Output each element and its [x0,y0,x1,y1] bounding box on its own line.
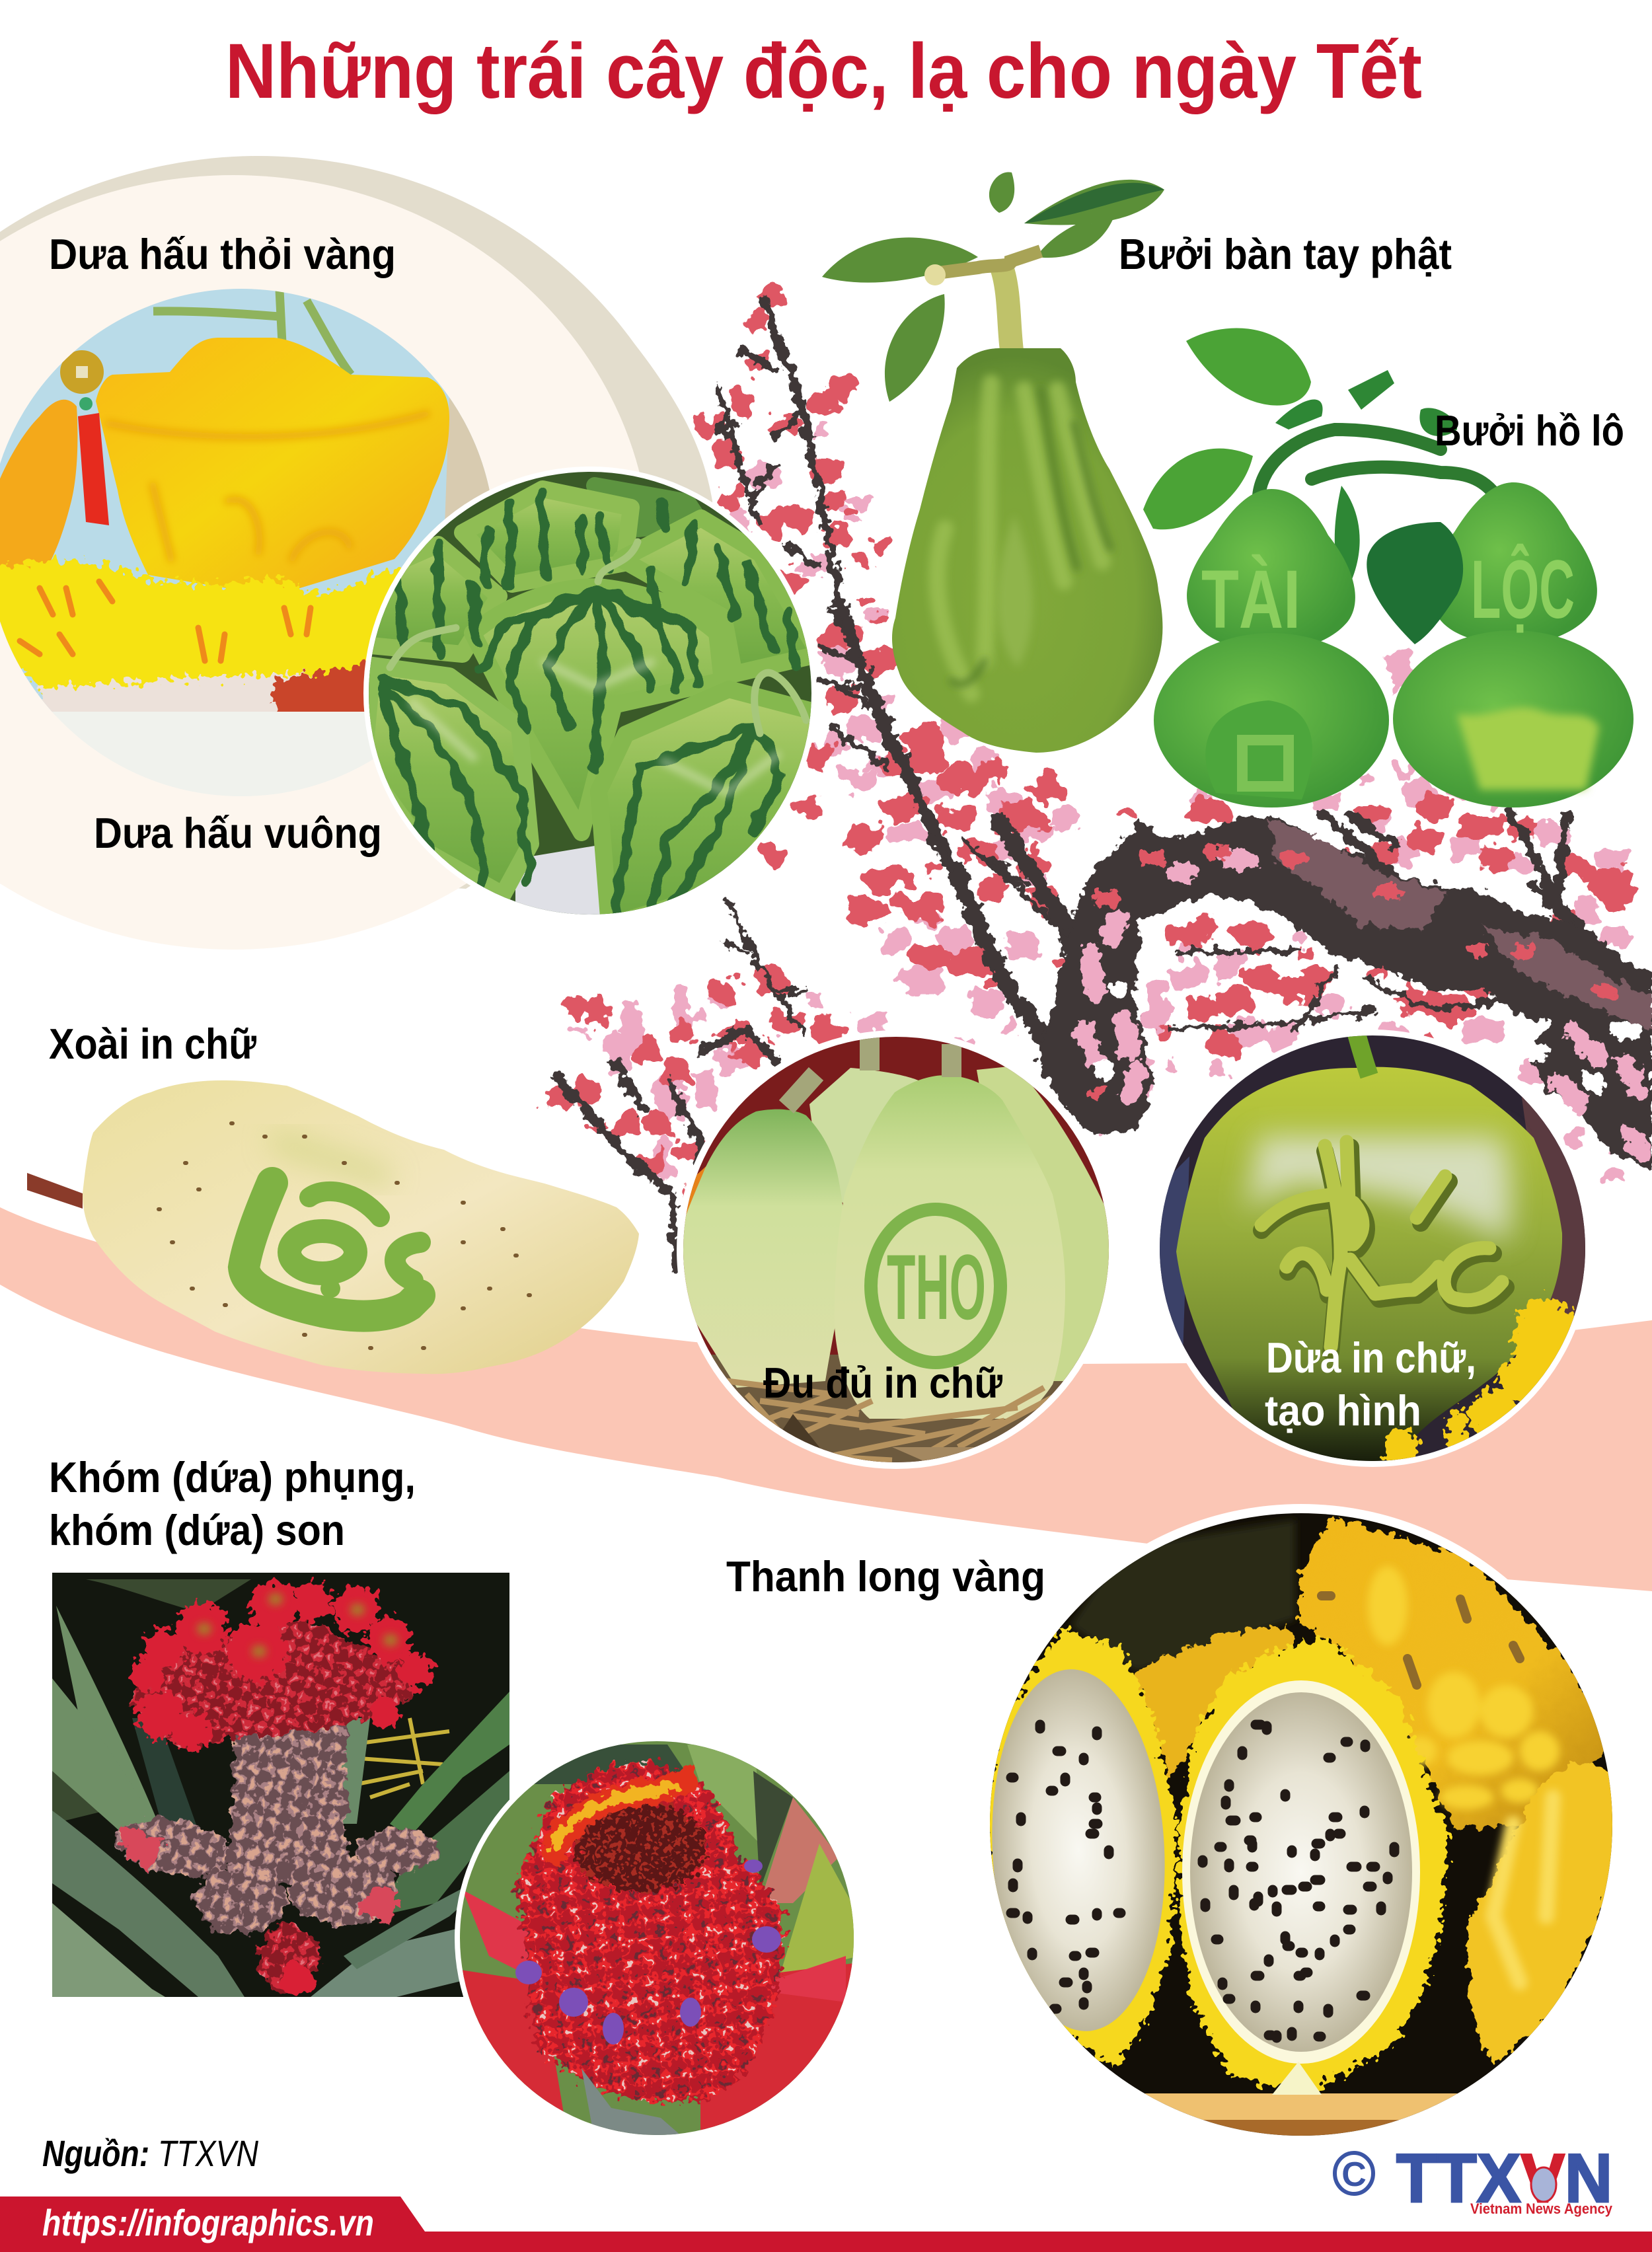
right lower fruit [1467,1761,1619,2064]
coconut body [1176,1067,1562,1470]
melon highlights [410,661,780,793]
bough mauve highlight [1269,819,1652,1031]
title: Những trái cây độc, lạ cho ngày Tết [225,28,1422,115]
lower red bracts [456,1963,859,2141]
vine [153,290,351,375]
green background [456,1738,859,2141]
coconut stem [1357,1034,1369,1076]
photo: red pineapple [455,1736,859,2141]
crown tufts [131,1582,435,1751]
dark crown centre [575,1802,707,1892]
label: coconut: Dừa in chữ, [1266,1333,1476,1382]
melon: top back [463,489,631,584]
pink lobe tips [119,1825,396,1923]
back centre papaya [809,1068,920,1209]
label: square watermelon: Dưa hấu vuông [94,809,382,857]
agency name: Vietnam News Agency [1470,2200,1613,2217]
pink on bough [1084,852,1641,1150]
red pineapple ring [455,1736,859,2140]
crest arc [554,1781,684,1850]
dark background [985,1507,1619,2141]
leaf dark heart [1367,522,1463,644]
stems [786,1037,952,1107]
mango stem [27,1173,83,1209]
melon: left [357,544,499,654]
back right papaya [977,1066,1117,1381]
centre back fruit [1135,1626,1295,1782]
logo: TTXVN [1335,2140,1613,2217]
gourd branches [1259,430,1500,502]
right gourd [1393,482,1633,807]
photo: yellow dragon fruit [981,1504,1622,2146]
white ring [363,467,817,920]
website url: https://infographics.vn [42,2202,374,2243]
label: coconut [1265,1333,1476,1435]
photo: phoenix pineapple [52,1573,509,1997]
coin emboss [1205,700,1312,800]
pear body [892,348,1162,753]
copyright mark [1335,2153,1373,2194]
crown tuft highlights [203,1599,392,1651]
printed mark [871,1209,1000,1363]
papaya ring [677,1030,1115,1469]
grey leaf at base [582,2068,687,2141]
copyright mark: C [1341,2156,1367,2194]
footer bar [0,2196,1652,2252]
wooden table [985,2093,1619,2120]
left half flesh [983,1665,1174,2035]
yellow flowers [1384,1298,1579,1472]
pale base disc [0,284,509,800]
yellow flowers [0,554,402,694]
label: pineapple [49,1453,416,1554]
melon: bottom right [599,689,819,925]
front papaya [835,1075,1065,1419]
centre flesh [1190,1692,1412,2052]
melon: right back [621,518,819,674]
dragon ring [981,1504,1622,2145]
fruit base tips [1272,2062,1322,2095]
beige crescent [0,156,720,889]
small side fruit [0,400,77,582]
label: papaya: Đu đủ in chữ [763,1359,1003,1407]
photo background [0,284,509,712]
photo: mango [27,1080,639,1374]
melon: far back [595,486,700,529]
mango green blush [271,1140,390,1180]
flower centres [20,582,311,661]
red tassel [78,413,109,525]
globe [1531,2167,1556,2202]
ingot embossing [106,413,430,562]
label: gourd pomelo: Bưởi hồ lô [1435,406,1624,455]
seeds [1011,1725,1394,2038]
dark gaps [363,463,826,925]
label: coconut: tạo hình [1265,1386,1421,1435]
embossed word Phuc [1261,1142,1502,1347]
photo: papaya [674,1030,1117,1470]
pineapple leaves [52,1606,509,1997]
label: pineapple: khóm (dứa) son [49,1506,345,1554]
label: pineapple: Khóm (dứa) phụng, [49,1453,416,1501]
label: dragon fruit: Thanh long vàng [726,1552,1045,1600]
coin [60,350,104,410]
dark branches [555,297,1652,1267]
raised word left: TÀI [1201,554,1300,646]
fruit: buddha hand pomelo [822,172,1164,753]
plum blossom branches [555,294,1652,1267]
leaves [822,172,1164,402]
back right fruit [1299,1517,1612,1828]
label: buddha hand pomelo: Bưởi bàn tay phật [1119,230,1452,278]
coconut ring [1154,1030,1591,1467]
label: mango: Xoài in chữ [49,1020,257,1068]
coconut highlight [1242,1137,1511,1242]
centre half shell [1180,1639,1449,2093]
wordmark: TTXVN [1396,2140,1612,2217]
red petals [559,294,1624,1196]
mango body [83,1080,639,1374]
stem [1002,268,1012,350]
salmon ribbon band [0,1207,1652,1591]
white rim [1182,1680,1420,2064]
ingot emboss [1457,708,1599,790]
pear grooves [952,390,1110,685]
table [515,846,608,925]
mango printed word Loc [244,1183,420,1316]
label: gold ingot watermelon: Dưa hấu thỏi vàng [49,230,396,278]
coconut background [1156,1031,1593,1467]
yellow fronds [350,1718,449,1797]
bottom decoration [40,674,370,720]
straw [727,1381,1084,1460]
left half shell [985,1628,1178,2068]
photo: coconut [1154,1030,1593,1472]
back fruit bumps [1368,1566,1559,1809]
melon: centre [472,587,722,833]
melon stems [390,542,806,733]
pineapple body [515,1762,784,2103]
melon: bottom left [363,665,531,895]
source: Nguồn: TTXVN [42,2132,258,2174]
pink petals [575,430,1644,1176]
photo: papaya: THO [887,1235,986,1339]
pear finger mound [997,515,1032,667]
left gourd [1154,489,1389,807]
main bough [1036,817,1652,1170]
straw floor [681,1355,1117,1467]
photo: square watermelons [357,463,826,925]
upper crest [132,1619,423,1751]
gourd leaves [1143,328,1311,529]
purple flowers [515,1859,781,2045]
pale cloth [445,398,490,519]
fruit: gourd pomelos [1143,328,1633,807]
photo background [52,1573,509,1997]
embossed word Phuc: shadow [1261,1147,1506,1352]
mango speckles [159,1123,530,1348]
papaya background [681,1034,1117,1464]
melon stripes [383,492,796,912]
gold ingot fruit [96,338,449,596]
fasciated pineapple body [111,1714,437,1935]
pear ridges [938,383,1102,694]
photo: gold ingot watermelon [0,284,509,804]
left papaya [674,1109,845,1388]
small bottom fruit [259,1925,320,1996]
raised word right: LỘC [1471,544,1575,636]
cream circle panel [0,175,651,950]
